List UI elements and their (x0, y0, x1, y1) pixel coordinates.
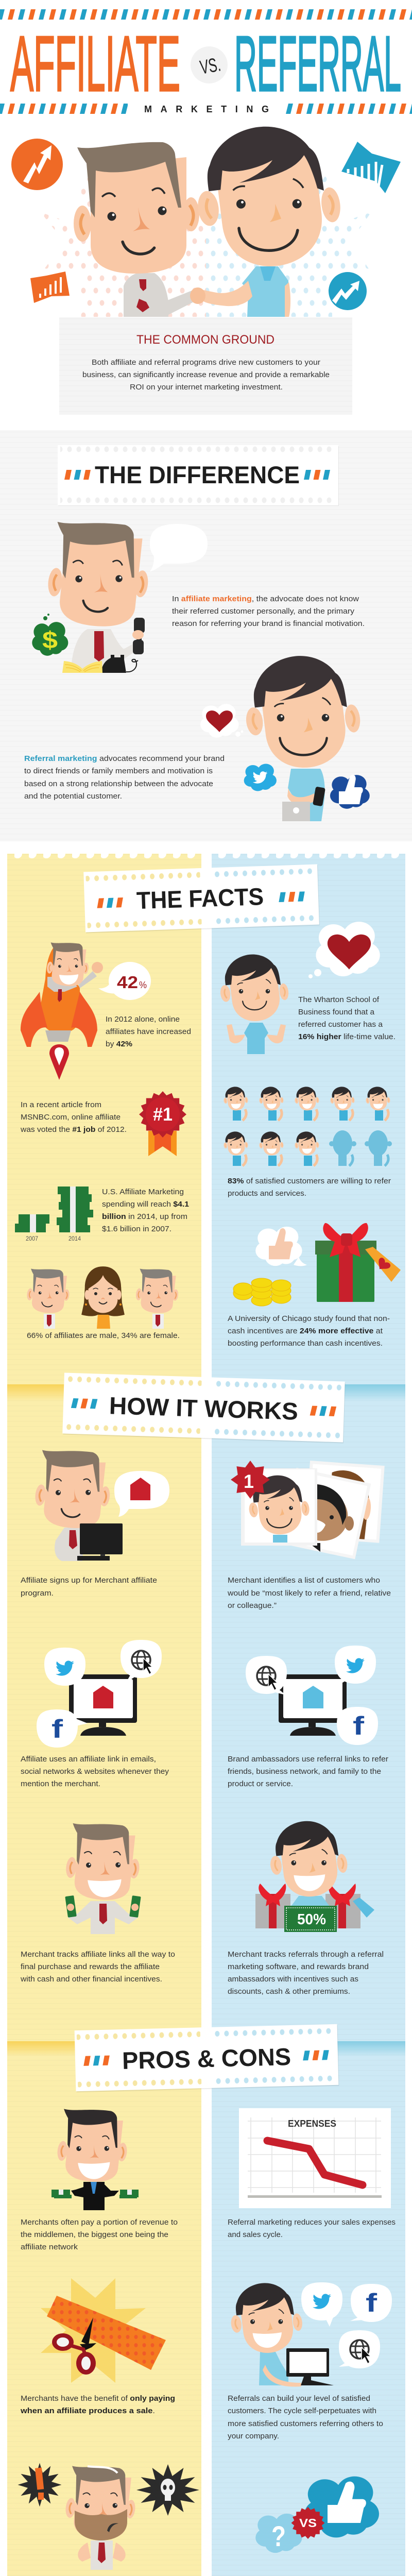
icon: orange chart flag (30, 272, 70, 303)
vs badge (191, 46, 228, 83)
icon: blue growth circle (329, 272, 367, 310)
marketing subtitle band: MARKETING (144, 104, 269, 114)
text: step three affiliate: with cash and other financial incentives. (20, 1975, 162, 1984)
referral man (189, 118, 347, 317)
text: step one referral: would be “most likely to refer a friend, relative (227, 1589, 391, 1598)
customer photo list (231, 1461, 385, 1559)
text: step three referral: marketing software, and rewards brand (228, 1962, 369, 1971)
icon: gift box (315, 1223, 401, 1302)
text: affiliate marketing: In affiliate marketing , the advocate does not know (172, 595, 359, 603)
text: wharton: 16% higher life-time value. (298, 1032, 396, 1041)
text: reduces expenses: and sales cycle. (228, 2230, 283, 2239)
text: step one referral: Merchant identifies a list of customers who (228, 1576, 380, 1585)
icon: blue chart flag (341, 142, 401, 193)
light cloud question: ? (271, 2520, 286, 2552)
icon: #1 badge: #1 (153, 1104, 173, 1125)
icon: smartphone (313, 787, 325, 806)
icon: money cloud: $ (42, 626, 58, 653)
heading: common ground: THE COMMON GROUND (136, 333, 274, 347)
affiliate at computer (32, 1447, 169, 1561)
icon: twitter bubble (44, 1648, 85, 1692)
callout: house bubble (114, 1471, 169, 1517)
male head (134, 1267, 181, 1329)
pictogram: satisfied customers (222, 1086, 392, 1166)
text: wharton: referred customer has a (298, 1020, 383, 1029)
icon: facebook bubble: f (353, 1711, 364, 1740)
gender heads (25, 1266, 181, 1329)
text: referral marketing: and the potential customer. (24, 792, 122, 801)
back photo (305, 1461, 385, 1543)
panel: referral blue column (212, 854, 405, 2576)
text: common ground body: Both affiliate and referral programs drive new customers to your (92, 358, 320, 367)
text: 2012 affiliates: In 2012 alone, online (106, 1015, 180, 1024)
text: msnbc #1 job: MSNBC.com, online affiliate (21, 1113, 121, 1122)
light cloud question (255, 2514, 302, 2553)
text: spending: $1.6 billion in 2007. (102, 1225, 171, 1233)
text: common ground body: business, can significantly increase revenue and provide a remarkable (82, 370, 330, 379)
versus clouds illustration (255, 2477, 379, 2553)
text: msnbc #1 job: In a recent article from (21, 1100, 101, 1109)
text: gender: 66% of affiliates are male, 34% are female. (27, 1331, 180, 1340)
middle photo (280, 1468, 371, 1559)
heading card: the difference (58, 445, 339, 506)
dark cloud thumb (304, 2477, 379, 2537)
text: step two affiliate: Affiliate uses an affiliate link in emails, (21, 1755, 156, 1764)
front photo (241, 1468, 317, 1546)
icon: monitor (69, 1674, 137, 1736)
heart thought bubble (308, 922, 380, 978)
heading card: pros and cons: PROS & CONS (122, 2043, 291, 2074)
axis labels: 2014 (68, 1235, 81, 1242)
text: con pays middlemen: affiliate network (21, 2243, 78, 2251)
handshake (190, 287, 205, 304)
text: affiliate marketing: reason for referring your brand is financial motivation. (172, 619, 365, 628)
text: step one affiliate: Affiliate signs up for Merchant affiliate (21, 1576, 157, 1585)
referral man with phone (200, 649, 370, 821)
text: step two referral: product or service. (228, 1780, 293, 1788)
speech bubble (150, 524, 208, 571)
text: build satisfied customers: more satisfied customers referring others to (228, 2419, 383, 2428)
chart title: EXPENSES (288, 2119, 336, 2129)
vs badge (291, 2507, 324, 2539)
icon: money cloud (32, 614, 68, 656)
text: wharton: The Wharton School of (298, 995, 380, 1004)
affiliate man (60, 129, 213, 317)
text: build satisfied customers (228, 2394, 383, 2441)
text: build satisfied customers: Referrals can build your level of satisfied (228, 2394, 370, 2403)
burst: skull (136, 2464, 199, 2516)
icon: cash stack right (119, 2190, 139, 2198)
text: step three affiliate: final purchase and rewards the affiliate (21, 1962, 160, 1971)
heading card: the facts: THE FACTS (136, 883, 264, 914)
bar 2014 (57, 1187, 93, 1232)
affiliate man with phone (32, 517, 154, 673)
text: step three referral: discounts, cash & other premiums. (228, 1987, 350, 1996)
heading card: the facts (83, 864, 320, 933)
number one badge (231, 1461, 270, 1499)
text: con pays middlemen (21, 2218, 178, 2251)
icon: twitter bubble (335, 1646, 376, 1686)
text: affiliate marketing (172, 595, 365, 628)
icon: open book (62, 661, 102, 673)
text: only paying: when an affiliate produces a sale . (20, 2406, 155, 2415)
text: spending (102, 1188, 189, 1233)
heading card: how it works: HOW IT WORKS (109, 1392, 299, 1425)
icon: phone handset (132, 618, 145, 654)
text: referral marketing: based on a strong relationship between the advocate (24, 779, 213, 788)
burst: warning (18, 2463, 62, 2507)
text: reduces expenses (228, 2218, 396, 2239)
icon: facebook bubble (37, 1709, 88, 1748)
text: step three referral (228, 1950, 384, 1996)
row two (222, 1130, 392, 1166)
text: 83 percent (228, 1177, 391, 1198)
icon: gifts (255, 1884, 374, 1928)
row one (222, 1086, 391, 1121)
icon: monitor (77, 1523, 123, 1561)
icon: web bubble (121, 1640, 162, 1682)
dark-haired man (309, 1484, 354, 1552)
text: wharton: Business found that a (298, 1008, 375, 1016)
title: AFFILIATE (10, 20, 180, 108)
icon: web bubble (246, 1656, 287, 1695)
icon: 50 percent coupon: 50% (297, 1911, 326, 1928)
icon: cash stack left (52, 2190, 72, 2198)
icon: #1 badge (139, 1091, 186, 1156)
icon: facebook bubble: f (52, 1715, 63, 1743)
text: spending: spending will reach $4.1 (102, 1200, 189, 1209)
star (41, 2278, 146, 2383)
icon: facebook bubble (330, 1707, 378, 1745)
icon: computer (286, 2348, 334, 2385)
icon: monitor (279, 1674, 347, 1736)
icon: heart bubble (200, 704, 243, 738)
text: step three referral: Merchant tracks referrals through a referral (228, 1950, 384, 1959)
text: step one referral (227, 1576, 391, 1610)
text: step two affiliate: social networks & websites whenever they (21, 1767, 169, 1776)
axis labels: 2007 (26, 1235, 38, 1242)
icon: web bubble (339, 2330, 380, 2368)
vs badge: VS (299, 2516, 317, 2530)
text: referral marketing (24, 754, 225, 801)
thumbs up boy (216, 951, 291, 1054)
text: step one affiliate (21, 1576, 157, 1598)
text: common ground body (82, 358, 330, 392)
panel: the common ground (59, 317, 352, 415)
vs badge: VS. (198, 54, 222, 79)
text: step two affiliate: mention the merchant. (21, 1780, 100, 1788)
text: build satisfied customers: your company. (228, 2432, 279, 2441)
text: university of chicago: A University of Chicago study found that non- (228, 1314, 390, 1323)
text: referral marketing: to direct friends or family members and motivation is (24, 767, 213, 775)
text: wharton (298, 995, 396, 1041)
merchant rewarding ambassador illustration (255, 1817, 374, 1932)
thumbs-up bubble (255, 1227, 307, 1266)
callout: 42 percent bubble (98, 962, 151, 1000)
text: only paying: Merchants have the benefit of only paying (21, 2394, 175, 2403)
text: only paying (20, 2394, 175, 2415)
affiliate links illustration (37, 1640, 162, 1748)
icon: 50 percent coupon (284, 1906, 337, 1932)
icon: telephone (101, 655, 138, 673)
text: university of chicago (228, 1314, 390, 1348)
text: step two affiliate (21, 1755, 169, 1788)
angry man illustration (18, 2463, 199, 2570)
referral links illustration (246, 1646, 378, 1745)
bar 2007 (15, 1214, 49, 1232)
icon: cash left (65, 1895, 77, 1918)
satisfied customer at computer illustration (227, 2279, 392, 2387)
text: 2012 affiliates: affiliates have increased (106, 1027, 191, 1036)
text: step three referral: ambassadors with incentives such as (228, 1975, 358, 1984)
icon: twitter bubble (301, 2282, 342, 2327)
callout: 42 percent bubble: 42 (117, 973, 138, 992)
scissors cutting ribbon illustration (41, 2278, 166, 2383)
text: 83 percent: products and services. (228, 1189, 306, 1198)
panel: affiliate yellow column (7, 854, 201, 2576)
icon: facebook bubble (350, 2284, 392, 2322)
text: step one affiliate: program. (21, 1589, 54, 1598)
text: 83 percent: 83% of satisfied customers are willing to refer (228, 1177, 391, 1185)
money stacks chart (15, 1187, 93, 1242)
text: step two referral (228, 1755, 388, 1788)
female head (81, 1266, 125, 1329)
text: con pays middlemen: the middlemen, the biggest one being the (21, 2230, 168, 2239)
icon: laptop (282, 802, 310, 821)
text: step two referral: friends, business network, and family to the (228, 1767, 381, 1776)
heading card: pros and cons (75, 2024, 339, 2092)
icon: orange growth circle (11, 139, 63, 190)
text: msnbc #1 job (20, 1100, 127, 1134)
text: reduces expenses: Referral marketing reduces your sales expenses (228, 2218, 396, 2227)
header stripes top (0, 9, 412, 20)
text: spending: billion in 2014, up from (102, 1212, 187, 1221)
text: spending: U.S. Affiliate Marketing (102, 1188, 184, 1196)
heading card: the difference: THE DIFFERENCE (95, 461, 300, 488)
male head (25, 1267, 72, 1329)
text: common ground body: ROI on your internet marketing investment. (130, 383, 283, 392)
ribbon (47, 2296, 166, 2370)
icon: facebook bubble: f (366, 2289, 377, 2317)
marketing subtitle band (0, 104, 412, 114)
text: step three affiliate: Merchant tracks affiliate links all the way to (21, 1950, 175, 1959)
icon: coins (233, 1278, 291, 1306)
merchant paying affiliate illustration (63, 1820, 144, 1934)
text: university of chicago: cash incentives are 24% more effective at (228, 1327, 383, 1335)
hero illustration: handshake (11, 118, 401, 317)
text: step three affiliate (20, 1950, 175, 1984)
number one badge: 1 (244, 1471, 254, 1492)
text: con pays middlemen: Merchants often pay a portion of revenue to (21, 2218, 178, 2227)
icon: like cloud (330, 775, 370, 809)
text: referral marketing: Referral marketing advocates recommend your brand (24, 754, 225, 763)
background stars (41, 170, 372, 317)
rocket man illustration (21, 941, 103, 1080)
text: build satisfied customers: customers. The cycle self-perpetuates with (228, 2406, 376, 2415)
axis labels (26, 1235, 81, 1242)
text: step two referral: Brand ambassadors use referral links to refer (228, 1755, 388, 1764)
text: affiliate marketing: their referred customer personally, and the primary (172, 607, 355, 616)
merchant in suit illustration (52, 2106, 139, 2210)
text: msnbc #1 job: was voted the #1 job of 2012. (20, 1125, 127, 1134)
line chart: expenses (239, 2108, 391, 2208)
chart line (267, 2141, 363, 2185)
text: 2012 affiliates (106, 1015, 191, 1048)
icon: twitter cloud (244, 764, 277, 791)
scissors (52, 2317, 96, 2375)
heading card: how it works (62, 1372, 346, 1444)
panel: the difference (0, 430, 412, 841)
callout: 42 percent bubble: % (139, 980, 147, 990)
text: 2012 affiliates: by 42% (106, 1040, 132, 1048)
text: university of chicago: boosting performance than cash incentives. (228, 1339, 383, 1348)
icon: cash right (129, 1895, 141, 1918)
text: step one referral: or colleague.” (228, 1601, 277, 1610)
